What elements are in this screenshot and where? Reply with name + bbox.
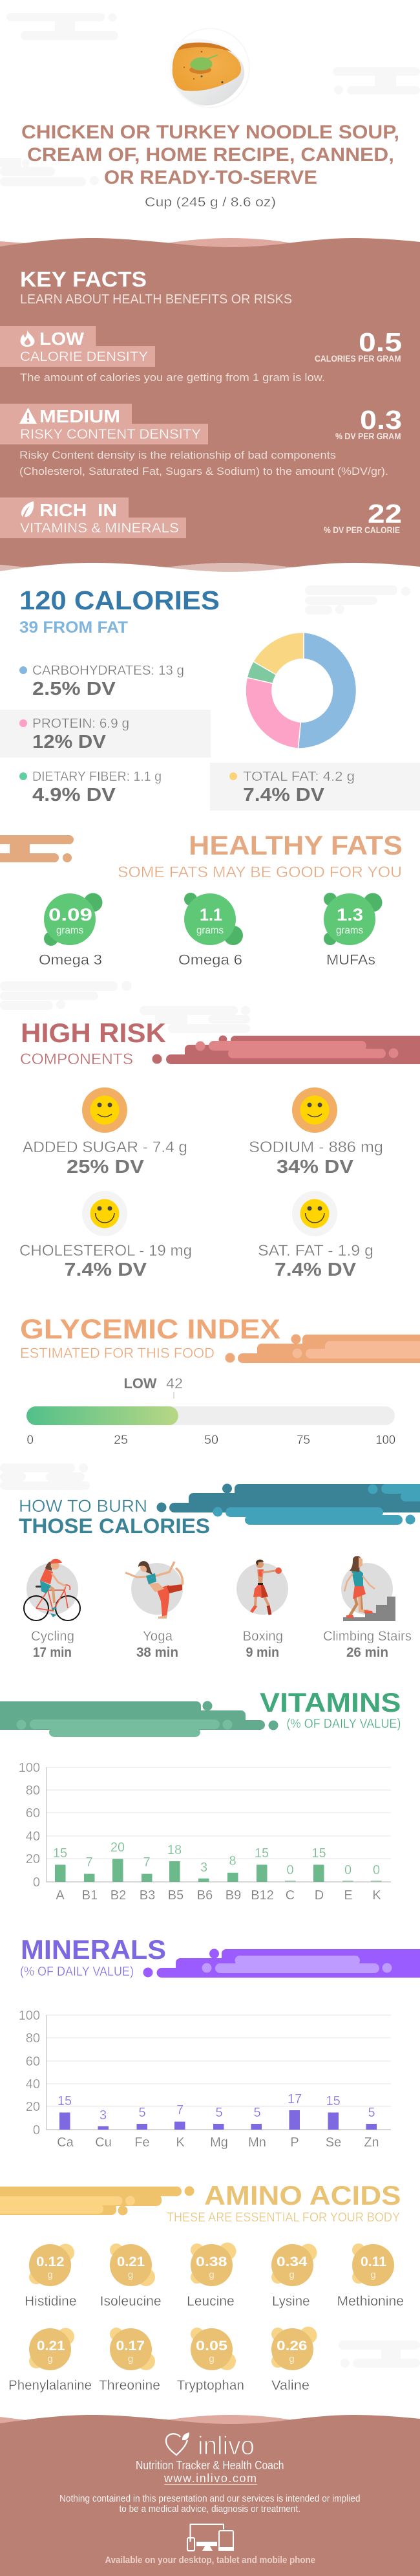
legend: protein xyxy=(0,710,211,758)
heading: amino acids: THESE ARE ESSENTIAL FOR YOUR BODY xyxy=(167,2210,400,2225)
fact: medium risky content density: % DV PER GRAM xyxy=(335,431,401,441)
donut chart xyxy=(246,633,357,748)
heading: healthy fats: HEALTHY FATS xyxy=(189,830,403,860)
bar chart: minerals: Mn xyxy=(248,2135,266,2150)
footer text: www.inlivo.com xyxy=(163,2472,257,2485)
bar chart: vitamins: 15 xyxy=(255,1846,269,1861)
key facts heading: KEY FACTS xyxy=(20,267,147,291)
bar chart: minerals: 3 xyxy=(100,2108,107,2123)
bar chart: vitamins: 0 xyxy=(344,1863,352,1877)
glycemic index gauge: 25 xyxy=(114,1434,128,1447)
amino: tryptophan: 0.05 xyxy=(196,2339,227,2353)
bar chart: vitamins: 7 xyxy=(143,1855,151,1870)
heading: calories xyxy=(19,585,220,637)
activity labels: 38 min xyxy=(136,1645,178,1660)
bar chart: minerals: 20 xyxy=(26,2100,40,2114)
risk: cholesterol: CHOLESTEROL - 19 mg xyxy=(19,1242,192,1260)
heading: calories: 39 FROM FAT xyxy=(19,618,128,637)
fact: medium risky content density: Risky Content density is the relationship of bad components xyxy=(19,449,336,461)
fat: omega 6: Omega 6 xyxy=(178,952,242,968)
fat: mufas xyxy=(324,893,383,968)
activity labels xyxy=(31,1629,412,1660)
amino: valine xyxy=(271,2326,317,2393)
bar chart: vitamins: B6 xyxy=(197,1888,213,1903)
amino: threonine: Threonine xyxy=(99,2378,160,2393)
activity: boxing xyxy=(236,1560,288,1615)
legend: dietary fiber: DIETARY FIBER: 1.1 g xyxy=(32,769,162,784)
fact: rich in vitamins and minerals: 22 xyxy=(368,499,402,529)
bar chart: vitamins: E xyxy=(344,1888,353,1903)
amino: histidine: g xyxy=(47,2269,53,2280)
footer text: Nothing contained in this presentation and our services is intended or implied xyxy=(59,2494,361,2504)
bar chart: minerals xyxy=(19,2009,391,2150)
title: CHICKEN OR TURKEY NOODLE SOUP, xyxy=(21,122,399,143)
fact: rich in vitamins and minerals: % DV PER CALORIE xyxy=(324,525,400,535)
amino: valine: Valine xyxy=(271,2378,310,2393)
risk: cholesterol: 7.4% DV xyxy=(65,1260,147,1280)
amino: tryptophan xyxy=(177,2328,244,2393)
panel: key facts xyxy=(0,238,420,572)
amino: leucine: g xyxy=(209,2269,215,2280)
fat: omega 3: Omega 3 xyxy=(39,952,102,968)
bar chart: minerals: 15 xyxy=(58,2094,72,2108)
fact: medium risky content density: RISKY CONTENT DENSITY xyxy=(20,427,201,442)
activity: yoga xyxy=(125,1561,183,1619)
bar chart: minerals: Cu xyxy=(95,2135,112,2150)
icon: soup bowl xyxy=(170,28,250,108)
amino: isoleucine: Isoleucine xyxy=(100,2294,162,2309)
bar chart: vitamins: 40 xyxy=(26,1829,40,1844)
heading: minerals: (% OF DAILY VALUE) xyxy=(20,1964,134,1979)
heading: minerals: MINERALS xyxy=(21,1934,166,1965)
fact: medium risky content density: MEDIUM xyxy=(39,406,120,426)
risk: saturated fat: SAT. FAT - 1.9 g xyxy=(258,1242,373,1260)
activity labels: Climbing Stairs xyxy=(323,1629,412,1644)
activity labels: Yoga xyxy=(143,1629,173,1644)
footer text: Nutrition Tracker & Health Coach xyxy=(136,2458,284,2472)
glycemic index gauge: 0 xyxy=(27,1434,34,1447)
fact: low calorie density: CALORIES PER GRAM xyxy=(315,354,401,364)
fact: rich in vitamins and minerals xyxy=(0,497,402,538)
amino: histidine: 0.12 xyxy=(36,2254,65,2269)
fact: medium risky content density: 0.3 xyxy=(360,405,402,435)
bar chart: vitamins: C xyxy=(286,1888,295,1903)
amino: histidine xyxy=(25,2243,76,2309)
risk: saturated fat: 7.4% DV xyxy=(275,1260,357,1280)
amino: tryptophan: g xyxy=(209,2353,215,2364)
fat: omega 6 xyxy=(178,893,243,968)
fact: rich in vitamins and minerals: RICH IN xyxy=(39,500,117,520)
fat: omega 6: 1.1 xyxy=(200,905,222,924)
amino: methionine xyxy=(337,2243,404,2309)
legend: protein: 12% DV xyxy=(32,732,107,752)
fact: medium risky content density xyxy=(0,404,402,477)
risk: sodium: 34% DV xyxy=(277,1157,354,1177)
risk: saturated fat xyxy=(258,1191,373,1280)
heading: calories: 120 CALORIES xyxy=(19,585,220,615)
activity labels: Boxing xyxy=(243,1629,283,1644)
amino: threonine xyxy=(99,2328,160,2393)
decoration: healthy fats band xyxy=(0,835,74,862)
bar chart: vitamins: 60 xyxy=(26,1806,40,1820)
serving size: Cup (245 g / 8.6 oz) xyxy=(145,195,276,210)
amino: threonine: g xyxy=(128,2353,133,2364)
decoration: vitamins band xyxy=(0,1701,278,1737)
amino: histidine: Histidine xyxy=(25,2294,76,2309)
heading: healthy fats: SOME FATS MAY BE GOOD FOR YOU xyxy=(118,864,402,881)
legend: protein: PROTEIN: 6.9 g xyxy=(32,716,129,731)
bar chart: vitamins: 100 xyxy=(19,1761,40,1775)
fact: low calorie density: 0.5 xyxy=(359,327,402,357)
bar chart: vitamins: B2 xyxy=(110,1888,126,1903)
bar chart: vitamins: 20 xyxy=(26,1852,40,1866)
bar chart: vitamins: 3 xyxy=(200,1861,207,1875)
bar chart: vitamins: 7 xyxy=(85,1855,93,1870)
amino: phenylalanine: g xyxy=(47,2353,53,2364)
amino: phenylalanine: Phenylalanine xyxy=(8,2378,92,2393)
bar chart: vitamins: 20 xyxy=(110,1840,125,1855)
amino: lysine xyxy=(271,2243,317,2309)
bar chart: vitamins: 15 xyxy=(311,1846,326,1861)
amino: leucine: 0.38 xyxy=(196,2254,227,2269)
footer text xyxy=(59,2458,361,2515)
bar chart: vitamins: 0 xyxy=(373,1863,380,1877)
fat: omega 6: grams xyxy=(196,925,224,936)
activity labels: 9 min xyxy=(246,1645,279,1660)
risk: sodium: SODIUM - 886 mg xyxy=(249,1139,383,1156)
legend: total fat xyxy=(210,763,420,811)
amino: lysine: g xyxy=(289,2269,295,2280)
heading: high risk xyxy=(20,1018,166,1068)
bar chart: minerals: 7 xyxy=(176,2103,184,2117)
footer text: to be a medical advice, diagnosis or treatment. xyxy=(119,2504,300,2515)
bar chart: vitamins: B9 xyxy=(226,1888,241,1903)
bar chart: minerals: K xyxy=(176,2135,185,2150)
bar chart: vitamins: 8 xyxy=(229,1854,236,1868)
glycemic index gauge: 42 xyxy=(166,1375,183,1392)
fat: omega 3: 0.09 xyxy=(48,905,92,924)
bar chart: minerals: 100 xyxy=(19,2009,40,2023)
risk: cholesterol xyxy=(19,1191,192,1280)
decoration: minerals band xyxy=(143,1948,420,1978)
bar chart: vitamins xyxy=(19,1761,391,1903)
decoration: burn band xyxy=(156,1484,420,1525)
heading: healthy fats xyxy=(118,830,403,881)
title: CREAM OF, HOME RECIPE, CANNED, xyxy=(27,144,394,166)
fact: low calorie density: LOW xyxy=(39,329,85,349)
bar chart: minerals: P xyxy=(290,2135,299,2150)
bar chart: minerals: 5 xyxy=(215,2106,223,2120)
activity labels: 17 min xyxy=(33,1645,72,1660)
logo: inlivo xyxy=(166,2432,255,2460)
amino: tryptophan: Tryptophan xyxy=(177,2378,244,2393)
legend: carbohydrates: CARBOHYDRATES: 13 g xyxy=(32,663,184,678)
fact: low calorie density: CALORIE DENSITY xyxy=(20,349,148,364)
amino: valine: 0.26 xyxy=(277,2339,308,2353)
fact: low calorie density xyxy=(0,326,402,384)
amino: threonine: 0.17 xyxy=(116,2339,145,2353)
amino: leucine: Leucine xyxy=(187,2294,235,2309)
activity: cycling xyxy=(24,1559,80,1621)
amino: isoleucine: g xyxy=(128,2269,133,2280)
glycemic index gauge xyxy=(26,1375,395,1447)
heading: how to burn those calories xyxy=(19,1496,210,1538)
logo: inlivo: inlivo xyxy=(198,2432,255,2460)
heading: glycemic index: GLYCEMIC INDEX xyxy=(20,1314,280,1345)
bar chart: vitamins: 15 xyxy=(53,1846,67,1861)
glycemic index gauge: LOW xyxy=(124,1375,157,1392)
heading: amino acids: AMINO ACIDS xyxy=(204,2180,401,2210)
risk: sodium xyxy=(249,1087,383,1177)
fat: mufas: grams xyxy=(336,925,363,936)
bar chart: minerals: 5 xyxy=(368,2106,375,2120)
decoration: glycemic band xyxy=(225,1334,420,1363)
amino: isoleucine: 0.21 xyxy=(117,2254,145,2269)
heading: vitamins: VITAMINS xyxy=(260,1687,401,1718)
bar chart: vitamins: B12 xyxy=(251,1888,274,1903)
heading: vitamins xyxy=(260,1687,401,1731)
risk: added sugar: ADDED SUGAR - 7.4 g xyxy=(23,1139,187,1156)
activity labels: Cycling xyxy=(31,1629,74,1644)
heading: how to burn those calories: HOW TO BURN xyxy=(19,1496,147,1516)
fact: rich in vitamins and minerals: VITAMINS & MINERALS xyxy=(20,521,179,536)
glycemic index gauge: 50 xyxy=(204,1434,218,1447)
title xyxy=(21,122,399,188)
fat: omega 3 xyxy=(39,893,102,968)
legend: carbohydrates: 2.5% DV xyxy=(32,679,116,699)
bar chart: minerals: 5 xyxy=(253,2106,261,2120)
icon: devices xyxy=(187,2524,234,2551)
heading: glycemic index: ESTIMATED FOR THIS FOOD xyxy=(20,1345,215,1361)
bar chart: minerals: Zn xyxy=(364,2135,379,2150)
activity labels: 26 min xyxy=(346,1645,388,1660)
fact: low calorie density: The amount of calories you are getting from 1 gram is low. xyxy=(20,371,325,384)
panel: footer xyxy=(0,2415,420,2576)
bar chart: minerals: 0 xyxy=(33,2123,40,2137)
heading: high risk: HIGH RISK xyxy=(21,1018,166,1048)
fat: mufas: MUFAs xyxy=(326,952,375,968)
amino: leucine xyxy=(187,2242,236,2309)
glycemic index gauge: 100 xyxy=(376,1434,395,1447)
amino: valine: g xyxy=(289,2353,295,2364)
legend: total fat: TOTAL FAT: 4.2 g xyxy=(243,769,355,784)
amino: phenylalanine: 0.21 xyxy=(37,2339,65,2353)
bar chart: minerals: 60 xyxy=(26,2055,40,2069)
amino: methionine: 0.11 xyxy=(361,2254,386,2269)
bar chart: vitamins: A xyxy=(56,1888,65,1903)
fact: medium risky content density: (Cholesterol, Saturated Fat, Sugars & Sodium) to the amount (%DV/gr). xyxy=(19,465,388,477)
bar chart: vitamins: 80 xyxy=(26,1784,40,1798)
key facts heading xyxy=(20,267,292,307)
bar chart: minerals: 80 xyxy=(26,2031,40,2046)
heading: how to burn those calories: THOSE CALORIES xyxy=(19,1514,210,1538)
amino: lysine: Lysine xyxy=(272,2294,310,2309)
heading: glycemic index xyxy=(20,1314,280,1361)
amino: phenylalanine xyxy=(8,2328,92,2393)
bar chart: minerals: 40 xyxy=(26,2077,40,2091)
decoration: amino acids band xyxy=(0,2187,194,2215)
legend: dietary fiber xyxy=(19,769,162,805)
risk: added sugar xyxy=(23,1087,187,1177)
amino: methionine: g xyxy=(370,2269,376,2280)
heading: amino acids xyxy=(167,2180,401,2225)
bar chart: minerals: Se xyxy=(326,2135,341,2150)
amino: lysine: 0.34 xyxy=(277,2254,308,2269)
bar chart: minerals: Ca xyxy=(57,2135,74,2150)
legend: total fat: 7.4% DV xyxy=(243,785,325,805)
bar chart: vitamins: D xyxy=(315,1888,324,1903)
bar chart: vitamins: K xyxy=(372,1888,381,1903)
bar chart: minerals: 17 xyxy=(288,2092,302,2106)
bar chart: minerals: Mg xyxy=(210,2135,228,2150)
risk: added sugar: 25% DV xyxy=(67,1157,145,1177)
glycemic index gauge: 75 xyxy=(297,1434,310,1447)
bar chart: minerals: 15 xyxy=(326,2094,341,2108)
decoration: high risk band xyxy=(152,1035,420,1064)
heading: minerals xyxy=(20,1934,166,1979)
amino: methionine: Methionine xyxy=(337,2294,404,2309)
heading: high risk: COMPONENTS xyxy=(20,1051,133,1068)
availability note: Available on your desktop, tablet and mobile phone xyxy=(105,2555,315,2566)
fat: omega 3: grams xyxy=(56,925,83,936)
bar chart: vitamins: 0 xyxy=(286,1863,294,1877)
activity: climbing stairs xyxy=(341,1556,395,1621)
bar chart: minerals: Fe xyxy=(134,2135,150,2150)
key facts heading: LEARN ABOUT HEALTH BENEFITS OR RISKS xyxy=(20,292,292,307)
title: OR READY-TO-SERVE xyxy=(104,167,317,188)
legend: carbohydrates xyxy=(19,663,184,699)
fat: mufas: 1.3 xyxy=(337,905,363,924)
legend: dietary fiber: 4.9% DV xyxy=(32,785,116,805)
bar chart: vitamins: 0 xyxy=(33,1875,40,1890)
heading: vitamins: (% OF DAILY VALUE) xyxy=(287,1716,401,1731)
amino: isoleucine xyxy=(100,2243,162,2309)
bar chart: vitamins: B5 xyxy=(168,1888,184,1903)
bar chart: minerals: 5 xyxy=(138,2106,146,2120)
bar chart: vitamins: B3 xyxy=(140,1888,155,1903)
bar chart: vitamins: 18 xyxy=(167,1843,182,1857)
bar chart: vitamins: B1 xyxy=(82,1888,98,1903)
